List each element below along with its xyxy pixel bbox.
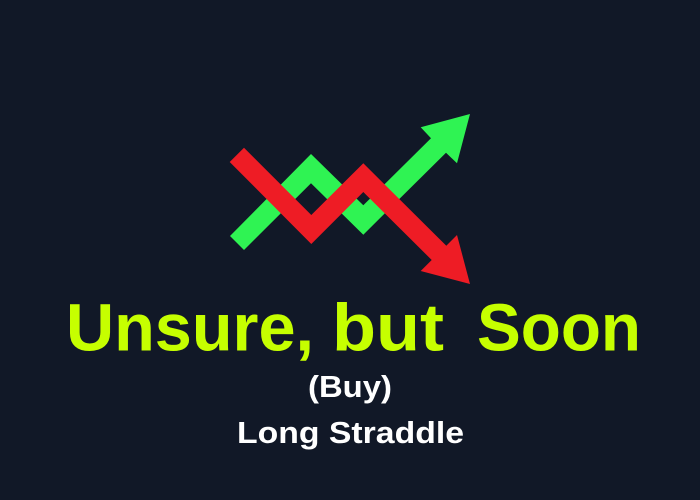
subtitle: buy: (Buy) <box>308 369 392 404</box>
title: but <box>332 290 444 366</box>
red down arrow <box>230 148 470 284</box>
strategy name: Long Straddle <box>237 415 464 450</box>
title: Soon <box>477 290 641 366</box>
green up arrow <box>230 114 470 250</box>
title <box>66 290 641 366</box>
title: Unsure, <box>66 290 314 366</box>
icon: crossing up and down arrows <box>230 114 470 284</box>
